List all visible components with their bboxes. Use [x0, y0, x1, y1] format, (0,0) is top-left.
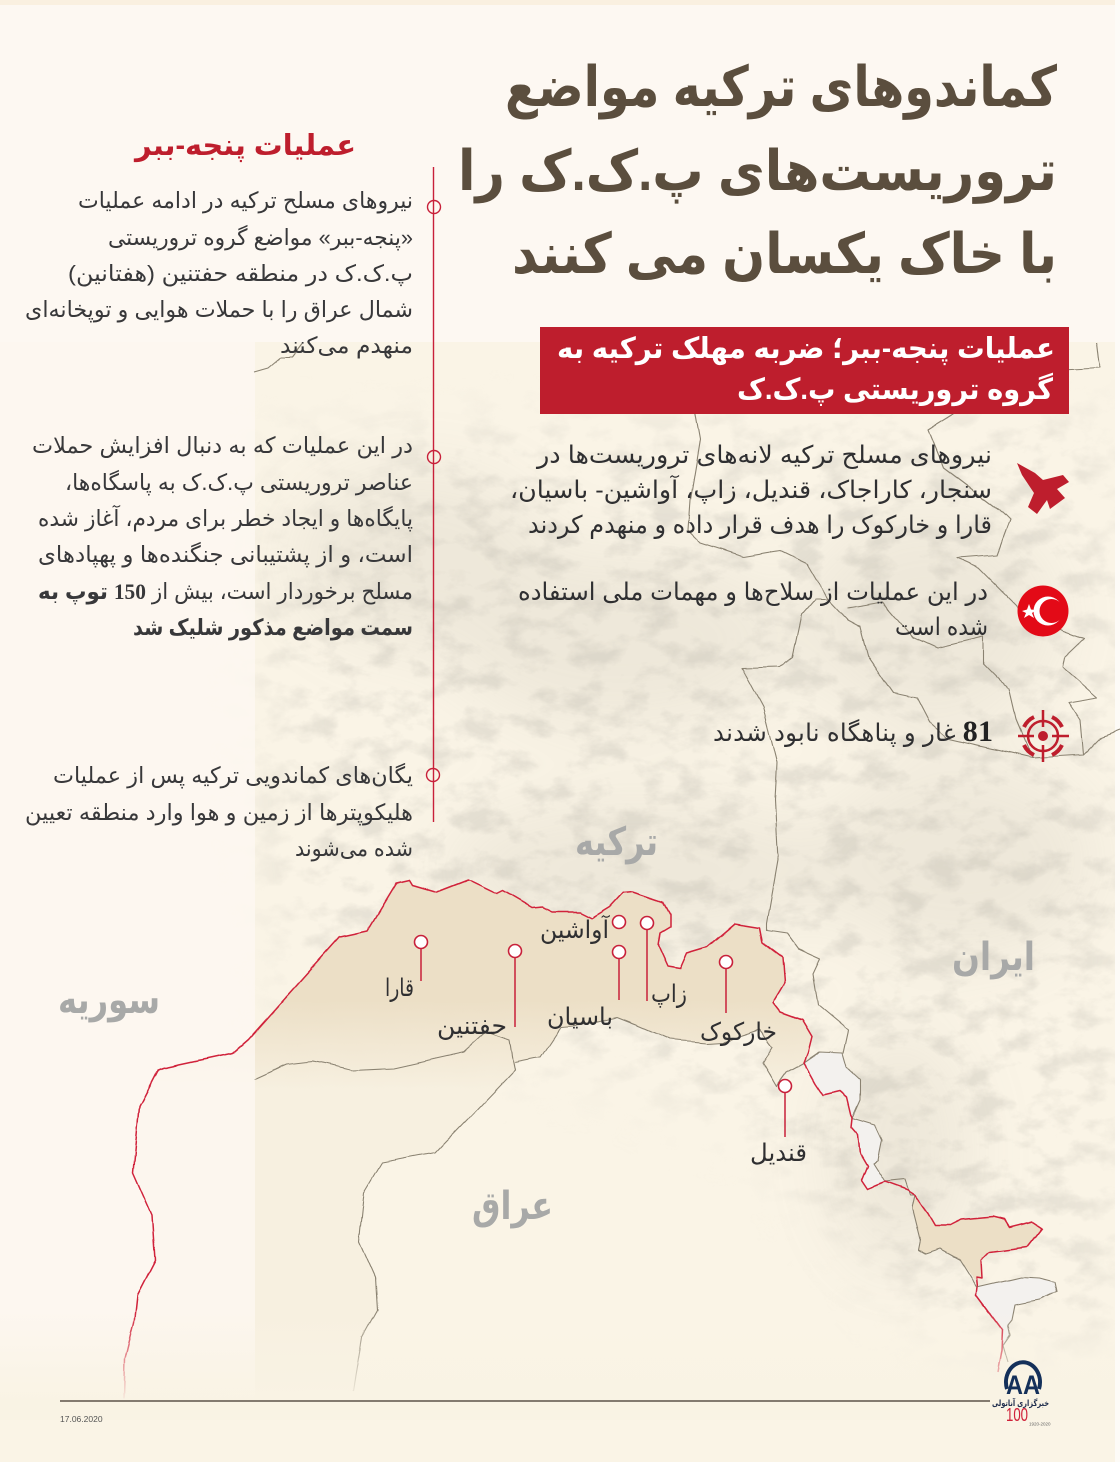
fact: targets: قارا و خارکوک را هدف قرار داده و منهدم کردند: [528, 512, 992, 539]
fact: targets: نیروهای مسلح ترکیه لانه‌های تروریست‌ها در: [535, 442, 992, 469]
fact: targets: [510, 442, 992, 539]
paragraph 3: هلیکوپترها از زمین و هوا وارد منطقه تعیین: [25, 800, 413, 826]
paragraph 1: نیروهای مسلح ترکیه در ادامه عملیات: [78, 188, 413, 214]
country labels: ترکیه: [575, 821, 658, 865]
logo: Anadolu Agency: 100: [1006, 1405, 1028, 1425]
logo: Anadolu Agency: AA: [1006, 1370, 1040, 1400]
title: با خاک یکسان می کنند: [512, 222, 1057, 285]
icon: fighter jet: [1017, 463, 1069, 514]
icon: Turkish flag: [1018, 586, 1068, 636]
paragraph 1: شمال عراق را با حملات هوایی و توپخانه‌ای: [25, 297, 413, 323]
footer rule: [60, 1400, 990, 1402]
fact: caves destroyed: 81 غار و پناهگاه نابود شدند: [713, 715, 993, 748]
heading: عملیات پنجه-ببر: [133, 130, 356, 163]
country labels: ایران: [952, 936, 1035, 980]
paragraph 2: عناصر تروریستی پ.ک.ک به پاسگاه‌ها،: [65, 469, 413, 496]
red headline box: گروه تروریستی پ.ک.ک: [737, 372, 1053, 406]
region: light zones: [804, 1052, 1057, 1345]
title: تروریست‌های پ.ک.ک را: [458, 139, 1057, 204]
paragraph 2: پایگاه‌ها و ایجاد خطر برای مردم، آغاز شده: [38, 504, 413, 532]
red headline box: عملیات پنجه-ببر؛ ضربه مهلک ترکیه به: [557, 333, 1055, 366]
logo: Anadolu Agency: 1920-2020: [1029, 1422, 1051, 1426]
pin: Avashin: آواشین: [540, 915, 610, 944]
gray borders: [254, 342, 1120, 1390]
country labels: عراق: [472, 1185, 553, 1229]
pin: Basyan: باسیان: [547, 1004, 613, 1031]
paragraph 2: مسلح برخوردار است، بیش از 150 توپ به: [38, 579, 413, 605]
country labels: سوریه: [58, 979, 160, 1023]
paragraph 3: یگان‌های کماندویی ترکیه پس از عملیات: [53, 762, 413, 789]
paragraph 3: [25, 762, 413, 862]
pin: Qandil: [750, 1080, 807, 1167]
pin: Haftanin: حفتنین: [437, 1013, 507, 1040]
timeline: [426, 167, 440, 822]
pin: Zap: [640, 916, 687, 1008]
red operation boundary: [124, 880, 1042, 1398]
pin: Zap: زاپ: [651, 981, 687, 1008]
paragraph 1: منهدم می‌کنند: [280, 333, 413, 359]
background: [255, 406, 1115, 1342]
logo: Anadolu Agency: خبرگزاری آناتولی: [992, 1397, 1049, 1409]
paragraph 2: است، و از پشتیبانی جنگنده‌ها و پهپادهای: [38, 541, 413, 568]
region: Zagros tan zone: [912, 1195, 1042, 1280]
pin: Kharkuk: [700, 956, 777, 1046]
logo: Anadolu Agency: [992, 1362, 1051, 1426]
panel: left column: [25, 130, 440, 862]
panel: right facts: [510, 442, 1069, 762]
icon: target: [1018, 710, 1069, 762]
paragraph 2: سمت مواضع مذکور شلیک شد: [133, 615, 413, 641]
paragraph 1: پ.ک.ک در منطقه حفتنین (هفتانین): [68, 261, 413, 287]
paragraph 3: شده می‌شوند: [295, 836, 413, 862]
region: northern Iraq operation zone: [124, 880, 812, 1398]
title: [458, 55, 1057, 285]
country labels: [58, 821, 1035, 1229]
pin: Kharkuk: خارکوک: [700, 1019, 777, 1046]
fact: national weapons: در این عملیات از سلاح‌ها و مهمات ملی استفاده: [518, 579, 988, 606]
pin: Qandil: قندیل: [750, 1140, 807, 1167]
paragraph 1: «پنجه-ببر» مواضع گروه تروریستی: [108, 224, 413, 251]
paragraph 1: [25, 188, 413, 359]
paragraph 2: [32, 433, 413, 641]
paragraph 2: در این عملیات که به دنبال افزایش حملات: [32, 433, 413, 459]
red headline box: [540, 327, 1069, 414]
bottom fade: [0, 1310, 1115, 1420]
date: 17.06.2020: [60, 1414, 103, 1424]
pin: Haftanin: [437, 944, 522, 1040]
fact: national weapons: [518, 579, 988, 641]
map borders: [124, 342, 1120, 1398]
pin: Qara: [385, 936, 428, 1002]
map regions: [124, 880, 1057, 1398]
location pins: [385, 915, 807, 1167]
pin: Basyan: [547, 946, 626, 1031]
pin: Qara: قارا: [385, 975, 414, 1002]
fact: national weapons: شده است: [895, 614, 988, 641]
fact: targets: سنجار، کاراجاک، قندیل، زاپ، آواشین- باسیان،: [510, 475, 992, 504]
